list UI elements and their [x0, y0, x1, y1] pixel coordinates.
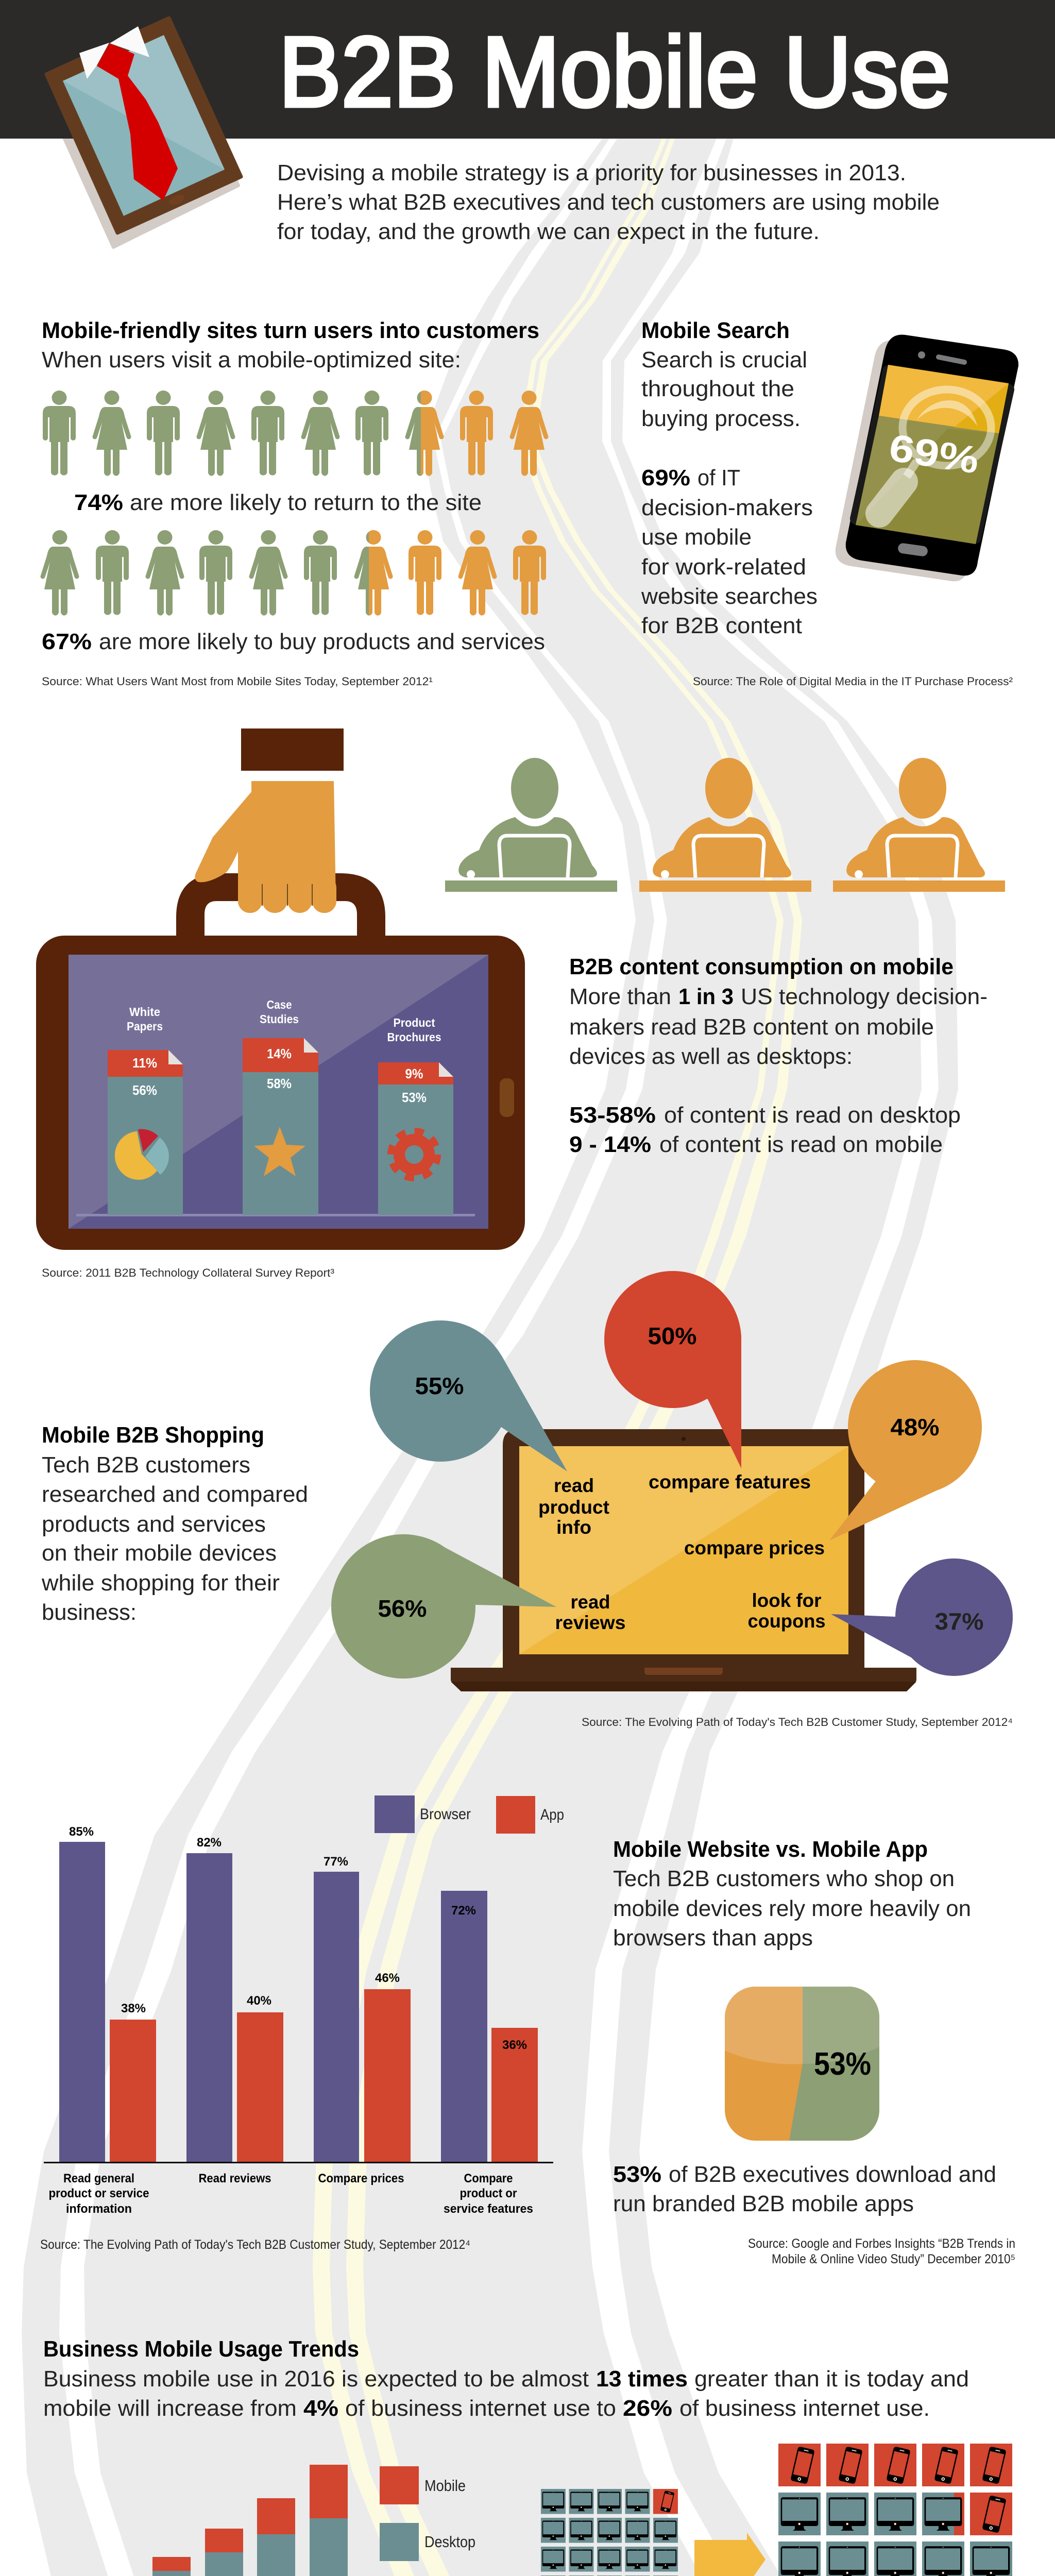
source: Source: The Role of Digital Media in the IT Purchase Process²	[693, 675, 1013, 688]
panel: mobile B2B shopping text: products and services	[42, 1512, 266, 1537]
bar chart: browser vs app: Compare	[464, 2172, 513, 2185]
bar chart: browser vs app: product or	[460, 2187, 517, 2200]
source	[748, 2236, 1015, 2266]
subheading: When users visit a mobile-optimized site:	[42, 347, 461, 372]
document bar: white papers: 11%	[132, 1055, 157, 1071]
document bar: product brochures	[378, 1016, 453, 1215]
bar chart: browser vs app: 40%	[247, 1994, 271, 2008]
stat: 67%: are more likely to buy products and services	[99, 629, 545, 654]
source: Mobile & Online Video Study” December 2010⁵	[772, 2252, 1015, 2266]
text: 53% of executives: 53%	[613, 2162, 661, 2187]
text block: B2B content consumption: More than	[569, 984, 671, 1009]
text block: business mobile usage trends: of business internet use to	[345, 2396, 616, 2421]
callout: 56%	[331, 1534, 556, 1679]
text block: B2B content consumption	[569, 954, 988, 1157]
text block: mobile website vs app: Tech B2B customers who shop on	[613, 1866, 955, 1891]
text block: B2B content consumption: 1 in 3	[678, 984, 734, 1009]
laptop screen labels: look for	[752, 1590, 821, 1611]
search text block	[641, 347, 818, 638]
search text block: for B2B content	[641, 613, 802, 638]
bar chart: browser vs app: 46%	[375, 1971, 400, 1985]
title: B2B Mobile Use	[279, 16, 950, 127]
heading: mobile search: Mobile Search	[641, 318, 790, 343]
panel: mobile B2B shopping text: researched and compared	[42, 1482, 308, 1507]
laptop screen labels: reviews	[555, 1612, 625, 1633]
search text block: of IT	[697, 465, 740, 490]
document bar: case studies: Case	[267, 998, 292, 1011]
laptop screen labels: compare prices	[684, 1537, 825, 1558]
document bar: product brochures: Brochures	[387, 1030, 441, 1044]
text block: B2B content consumption: US technology decision-	[741, 984, 988, 1009]
callout: 37%: 37%	[934, 1608, 984, 1635]
laptop screen labels: info	[556, 1517, 591, 1538]
document bar: case studies: 14%	[267, 1046, 292, 1061]
people row: 74%	[43, 391, 548, 476]
bar chart: browser vs app: 77%	[324, 1855, 348, 1869]
legend: mobile and desktop: Mobile	[424, 2477, 466, 2495]
icons: three people at laptops	[445, 758, 1005, 892]
document bar: white papers: Papers	[127, 1020, 163, 1033]
text block: B2B content consumption: of content is read on desktop	[664, 1103, 961, 1128]
laptop screen labels	[538, 1471, 825, 1633]
text block: B2B content consumption: of content is read on mobile	[659, 1132, 943, 1157]
bar chart: browser vs app	[44, 1825, 553, 2216]
text block: mobile website vs app: browsers than apps	[613, 1925, 813, 1951]
arrow: 2011 to 2016	[694, 2533, 765, 2576]
laptop screen labels: read	[571, 1591, 610, 1613]
laptop screen labels: product	[538, 1497, 609, 1518]
source: Source: 2011 B2B Technology Collateral Survey Report³	[42, 1266, 334, 1279]
bar chart: browser vs app: 82%	[197, 1836, 222, 1850]
header bar	[0, 0, 1055, 139]
search text block: for work-related	[641, 554, 806, 580]
document bar: white papers	[108, 1005, 183, 1215]
tablet screen	[69, 955, 488, 1229]
hand	[195, 781, 336, 913]
heading: mobile-friendly sites: Mobile-friendly sites turn users into customers	[42, 318, 539, 343]
callout: 55%	[370, 1320, 567, 1471]
document bar: product brochures: 9%	[405, 1066, 423, 1081]
bar chart: browser vs app: Read general	[63, 2172, 134, 2185]
panel: mobile B2B shopping text: on their mobile devices	[42, 1540, 277, 1566]
text block: B2B content consumption: devices as well as desktops:	[569, 1044, 853, 1069]
text block: mobile website vs app	[613, 1837, 971, 1951]
stat: 74%: 74%	[74, 490, 123, 515]
intro text: Here’s what B2B executives and tech customers are using mobile	[277, 190, 940, 215]
document bar: product brochures: Product	[394, 1016, 435, 1029]
shirt cuff	[241, 728, 344, 771]
callout: 55%: 55%	[415, 1372, 464, 1399]
callout: 48%	[829, 1360, 982, 1540]
text block: B2B content consumption: B2B content consumption on mobile	[569, 954, 954, 979]
icon: phone with magnifier: 69%	[887, 426, 982, 482]
laptop screen labels: read	[554, 1475, 594, 1496]
people row: 67%	[41, 530, 546, 616]
panel: mobile B2B shopping text: Tech B2B customers	[42, 1452, 250, 1478]
source: Source: The Evolving Path of Today's Tech B2B Customer Study, September 2012⁴	[40, 2238, 470, 2252]
briefcase handle	[176, 873, 385, 938]
panel: mobile-friendly sites	[41, 318, 548, 688]
text block: B2B content consumption: 53-58%	[569, 1103, 656, 1128]
legend: browser vs app	[375, 1795, 564, 1834]
icon: laptop	[451, 1429, 916, 1691]
text block: business mobile usage trends: of business internet use.	[679, 2396, 930, 2421]
text: 53% of executives: of B2B executives download and	[669, 2162, 996, 2187]
stat: 74%: are more likely to return to the site	[130, 490, 482, 515]
icon: tablet shadow	[40, 26, 239, 247]
tablet body	[36, 936, 525, 1250]
stacked bar chart: desktop and mobile 2011-2016	[40, 2465, 355, 2576]
source: Source: Google and Forbes Insights “B2B Trends in	[748, 2236, 1015, 2251]
text: 53% of executives	[613, 2162, 996, 2216]
intro text	[277, 160, 940, 244]
stat: 67%: 67%	[42, 629, 92, 654]
bar chart: browser vs app: 72%	[451, 1904, 476, 1918]
text block: B2B content consumption: 9 - 14%	[569, 1132, 651, 1157]
text block: business mobile usage trends: 13 times	[596, 2366, 688, 2392]
text block: mobile website vs app: mobile devices rely more heavily on	[613, 1896, 971, 1921]
icon: tablet with shirt and tie	[46, 18, 241, 233]
search text block: throughout the	[641, 376, 794, 401]
icon: app tile pie chart 53%: 53%	[814, 2046, 871, 2082]
search text block: website searches	[641, 584, 818, 609]
document bar: case studies	[243, 998, 318, 1215]
icon: phone with magnifier	[836, 335, 1018, 581]
text block: business mobile usage trends: Business Mobile Usage Trends	[43, 2336, 359, 2362]
legend: browser vs app: App	[540, 1806, 564, 1823]
laptop screen labels: coupons	[748, 1611, 825, 1632]
document bar: product brochures: 53%	[402, 1090, 427, 1105]
bar chart: browser vs app: information	[66, 2202, 132, 2216]
callout: 37%	[831, 1558, 1013, 1676]
search text block: 69%	[641, 465, 690, 490]
text block: business mobile usage trends: Business mobile use in 2016 is expected to be almost	[43, 2366, 589, 2392]
document bar: case studies: 58%	[267, 1076, 292, 1091]
legend: browser vs app: Browser	[420, 1806, 471, 1823]
search text block: use mobile	[641, 524, 752, 550]
bar chart: browser vs app: 36%	[502, 2038, 527, 2052]
bar chart: browser vs app: Read reviews	[199, 2172, 271, 2185]
legend: mobile and desktop: Desktop	[424, 2533, 475, 2551]
text block: business mobile usage trends	[43, 2336, 969, 2421]
document bar: case studies: Studies	[260, 1012, 299, 1026]
panel: mobile B2B shopping text	[41, 1422, 308, 1625]
bar chart: browser vs app: product or service	[48, 2187, 149, 2200]
intro text: Devising a mobile strategy is a priority for businesses in 2013.	[277, 160, 906, 185]
callout: 50%: 50%	[648, 1323, 696, 1349]
bar chart: browser vs app: 85%	[69, 1825, 94, 1839]
device grid: 2016	[778, 2444, 1012, 2576]
document bar: white papers: 56%	[132, 1082, 157, 1098]
bar chart: browser vs app: Compare prices	[318, 2172, 404, 2185]
text block: B2B content consumption: makers read B2B content on mobile	[569, 1014, 934, 1040]
bar chart: browser vs app: 38%	[121, 2002, 146, 2015]
text block: business mobile usage trends: 4%	[303, 2396, 338, 2421]
panel: mobile B2B shopping text: while shopping for their	[41, 1570, 280, 1596]
panel: mobile B2B shopping text: business:	[42, 1600, 137, 1625]
text block: mobile website vs app: Mobile Website vs. Mobile App	[613, 1837, 928, 1862]
callout: 50%	[604, 1271, 741, 1468]
text block: business mobile usage trends: 26%	[623, 2396, 672, 2421]
legend: mobile and desktop	[380, 2466, 475, 2561]
search text block: buying process.	[641, 406, 801, 431]
icon: app tile pie chart 53%	[725, 1987, 879, 2141]
bar chart: browser vs app: service features	[444, 2202, 533, 2216]
document bar: white papers: White	[129, 1005, 160, 1019]
panel: mobile B2B shopping text: Mobile B2B Shopping	[42, 1422, 264, 1448]
callout: 48%: 48%	[890, 1414, 940, 1440]
search text block: Search is crucial	[641, 347, 807, 372]
device grid: 2011	[541, 2489, 678, 2576]
text: 53% of executives: run branded B2B mobile apps	[613, 2191, 914, 2216]
search text block: decision-makers	[641, 495, 813, 520]
panel: mobile search	[641, 318, 1018, 688]
text block: business mobile usage trends: greater than it is today and	[694, 2366, 969, 2392]
source: Source: The Evolving Path of Today's Tech B2B Customer Study, September 2012⁴	[582, 1716, 1013, 1728]
text block: business mobile usage trends: mobile will increase from	[43, 2396, 297, 2421]
source: Source: What Users Want Most from Mobile Sites Today, September 2012¹	[42, 675, 433, 688]
icon: hand holding tablet briefcase	[36, 728, 525, 1250]
laptop screen labels: compare features	[649, 1471, 811, 1493]
callout: 56%: 56%	[378, 1595, 427, 1622]
intro text: for today, and the growth we can expect in the future.	[277, 219, 820, 244]
